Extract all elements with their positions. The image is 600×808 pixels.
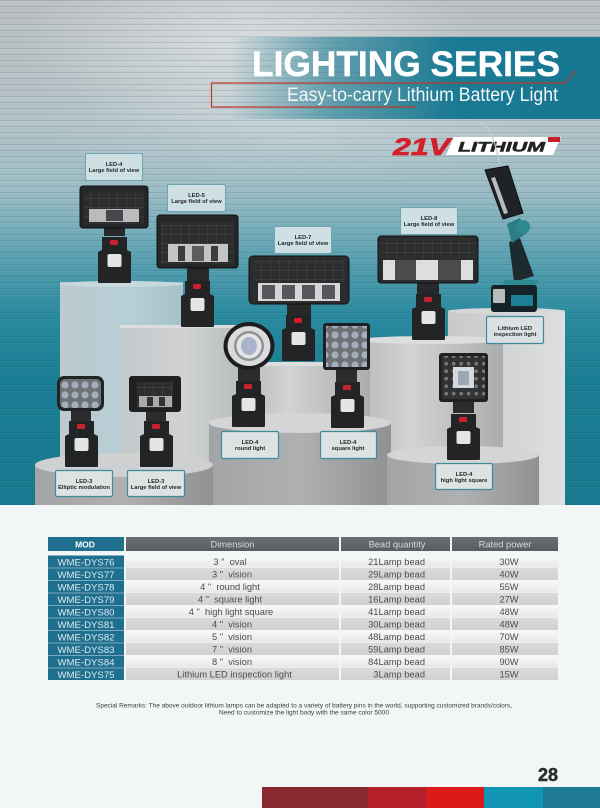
label: LED-4 round light: [222, 432, 278, 458]
lamp: elliptic modulation: [57, 376, 104, 467]
dimension column: 3 " oval: [213, 557, 247, 567]
label: LED-3 large field: LED-3: [148, 479, 165, 485]
rated power column: 48W: [499, 620, 519, 630]
lamp: high light square: [439, 353, 488, 460]
rated power column: 55W: [499, 582, 519, 592]
model column: WME-DYS82: [57, 632, 115, 644]
front left pedestal: [35, 453, 213, 505]
label: LED-3 elliptic modulation: Elliptic modulation: [58, 485, 110, 491]
dimension column: 5 " vision: [212, 632, 252, 642]
model column: WME-DYS80: [57, 608, 115, 618]
special remarks note: Need to customize the light body with the same color 5000: [219, 710, 390, 716]
model column: WME-DYS77: [57, 570, 115, 581]
label: LED-4 square light: LED-4: [340, 440, 357, 446]
bead quantity column: 16Lamp bead: [368, 594, 425, 604]
label: LED-5 large field: [168, 184, 226, 212]
bead quantity column: [368, 557, 425, 680]
label: LED-4 round light: round light: [235, 446, 265, 452]
label: LED-7 large field: Large field of view: [278, 241, 329, 247]
model column: WME-DYS79: [57, 595, 115, 606]
dimension column: 4 " square light: [198, 594, 263, 604]
dimension column: [177, 557, 292, 680]
mid left pedestal: [120, 325, 250, 505]
dimension column: 7 " vision: [212, 644, 252, 654]
row backgrounds: [126, 556, 558, 680]
rated power column: 90W: [499, 657, 519, 667]
bead quantity column: 59Lamp bead: [368, 644, 425, 654]
dimension column: Lithium LED inspection light: [177, 670, 292, 680]
bead quantity column: 21Lamp bead: [368, 557, 425, 567]
label: LED-4 large field: Large field of view: [89, 168, 140, 174]
21V lithium badge: 21V: [392, 134, 453, 161]
rated power column: 27W: [499, 594, 519, 604]
rated power column: 15W: [499, 670, 519, 680]
dimension column: 4 " high light square: [189, 607, 273, 617]
21V lithium badge: LITHIUM: [458, 138, 546, 154]
bead quantity column: 3Lamp bead: [373, 670, 425, 680]
special remarks note: [96, 702, 512, 716]
specification table: [48, 537, 558, 681]
label: inspection light: inspection light: [494, 332, 536, 338]
lamp: LED-7 large field: [249, 256, 349, 361]
dimension column: 4 " vision: [212, 620, 252, 630]
subtitle: Easy-to-carry Lithium Battery Light: [287, 85, 559, 106]
title: LIGHTING SERIES: [252, 45, 560, 84]
back left pedestal: [60, 281, 183, 505]
label: LED-5 large field: Large field of view: [171, 199, 222, 205]
bead quantity column: 84Lamp bead: [368, 657, 425, 667]
table header: Rated power: [479, 540, 531, 550]
label: inspection light: [486, 316, 544, 344]
label: LED-4 high light square: LED-4: [456, 472, 473, 478]
dimension column: 8 " vision: [212, 657, 252, 667]
model column: WME-DYS83: [57, 645, 115, 656]
lamp: round light: [224, 322, 274, 427]
label: LED-3 elliptic modulation: [56, 470, 112, 496]
21V lithium badge: [392, 134, 561, 161]
lamp: LED-8 large field: [378, 236, 478, 340]
label: LED-4 square light: square light: [332, 446, 364, 452]
model column: WME-DYS75: [57, 670, 115, 681]
bead quantity column: 29Lamp bead: [368, 570, 425, 580]
label: LED-3 elliptic modulation: LED-3: [76, 479, 93, 485]
special remarks note: Special Remarks: The above outdoor lithium lamps can be adapted to a variety of battery pins in the world, supporting customized brands/colors,: [96, 702, 512, 710]
bead quantity column: 48Lamp bead: [368, 632, 425, 642]
model column: WME-DYS76: [57, 558, 115, 568]
lamp: LED-5 large field: [157, 215, 238, 327]
label: LED-4 large field: [86, 154, 142, 180]
model column: [48, 556, 124, 681]
rated power column: 40W: [499, 570, 519, 580]
label: LED-4 square light: [320, 432, 376, 458]
dimension column: 4 " round light: [200, 582, 260, 592]
table header: MOD: [75, 540, 95, 550]
label: LED-8 large field: [400, 208, 458, 234]
rated power column: 48W: [499, 607, 519, 617]
centre pedestal: [245, 362, 370, 505]
pedestals: [35, 281, 565, 505]
label: LED-3 large field: [128, 470, 184, 496]
bead quantity column: 41Lamp bead: [368, 607, 425, 617]
bead quantity column: 30Lamp bead: [368, 620, 425, 630]
footer colour bar: [262, 787, 600, 808]
front right pedestal: [387, 446, 539, 505]
label: LED-3 large field: Large field of view: [131, 485, 182, 491]
title banner: [228, 37, 600, 119]
top right pedestal: [448, 308, 565, 505]
label: LED-4 large field: LED-4: [106, 162, 123, 168]
lamp: square light: [323, 323, 370, 428]
page number: 28: [538, 765, 558, 785]
label: LED-4 high light square: high light square: [441, 478, 488, 484]
lamp: large field small: [129, 376, 181, 467]
mid right pedestal: [359, 336, 503, 505]
red outline accent: [212, 70, 576, 107]
rated power column: 85W: [499, 644, 519, 654]
model column: WME-DYS84: [57, 658, 115, 668]
rated power column: [499, 557, 519, 680]
model column: WME-DYS78: [57, 582, 115, 594]
label: LED-7 large field: [274, 226, 332, 254]
label: LED-8 large field: LED-8: [421, 216, 438, 222]
photo backdrop: striped wall: [0, 0, 600, 505]
table header: Bead quantity: [369, 540, 426, 550]
rated power column: 70W: [499, 632, 519, 642]
model column: WME-DYS81: [57, 620, 115, 631]
bead quantity column: 28Lamp bead: [368, 582, 425, 592]
label: LED-4 high light square: [436, 464, 492, 490]
label: LED-5 large field: LED-5: [188, 193, 206, 199]
label: LED-8 large field: Large field of view: [404, 222, 455, 228]
table header: [48, 537, 558, 551]
rated power column: 30W: [499, 557, 519, 567]
dimension column: 3 " vision: [212, 570, 252, 580]
front centre pedestal: [209, 413, 391, 505]
label: LED-7 large field: LED-7: [295, 235, 311, 241]
label: LED-4 round light: LED-4: [242, 440, 259, 446]
lamp: LED-4 large field: [80, 186, 148, 283]
table header: Dimension: [211, 540, 254, 550]
label: inspection light: Lithium LED: [498, 326, 532, 332]
lamp: inspection light: [476, 124, 538, 312]
